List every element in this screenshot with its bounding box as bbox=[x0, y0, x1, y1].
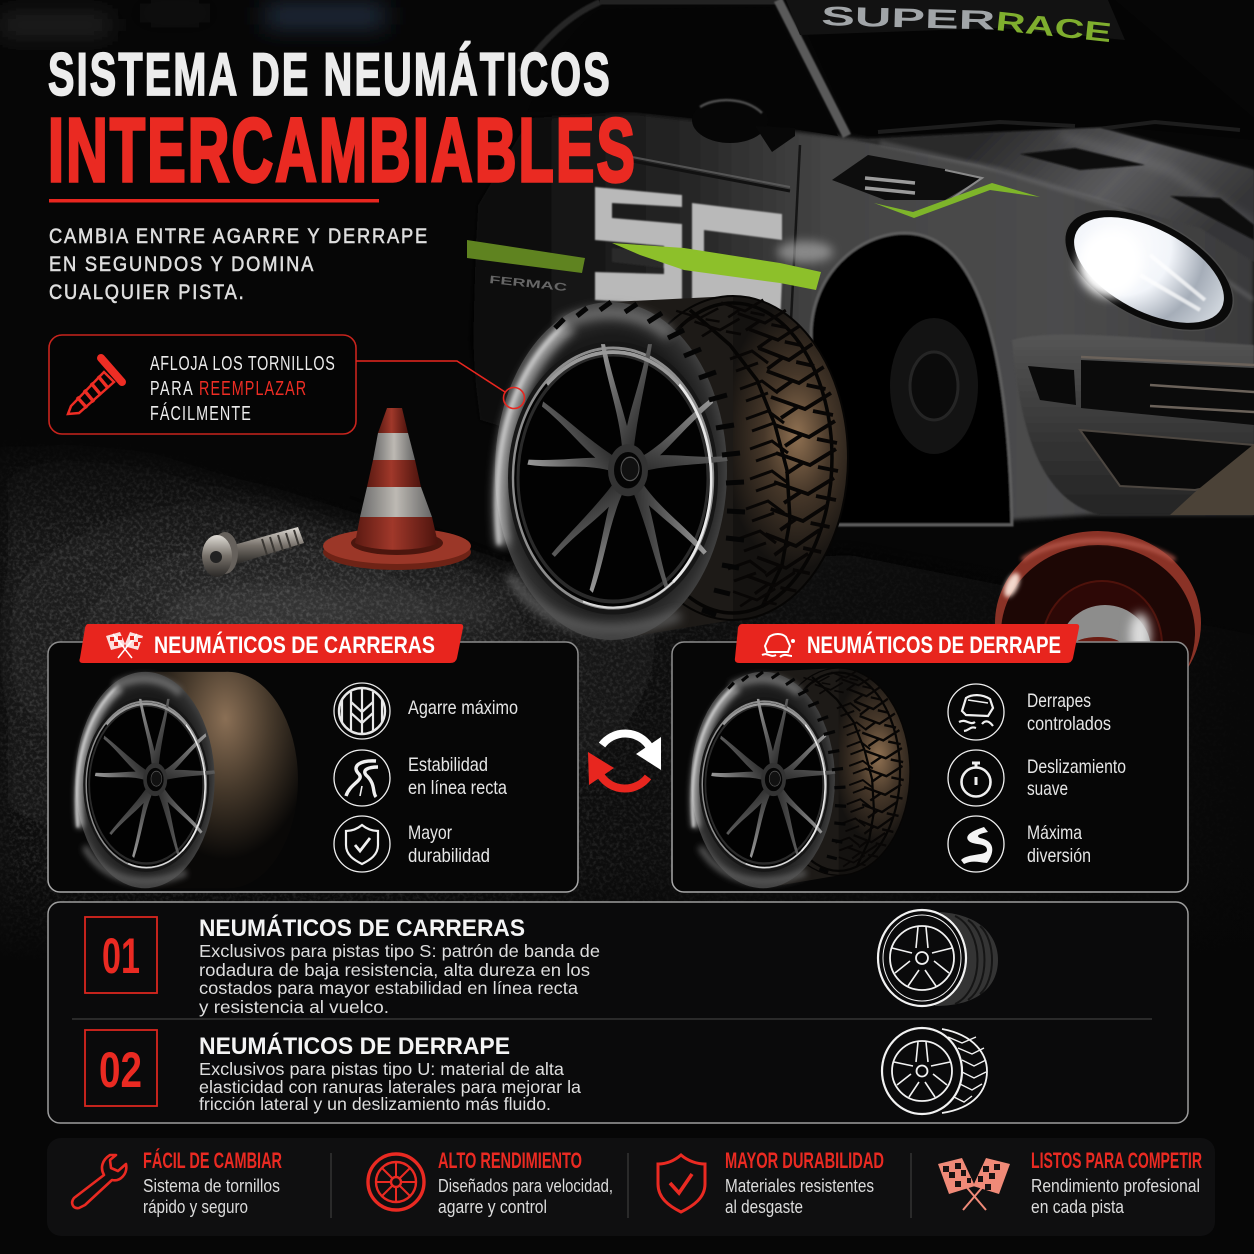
loose bolt bbox=[202, 527, 304, 577]
car roof and pillars bbox=[520, 0, 847, 136]
callout: loosen the screws bbox=[49, 335, 356, 434]
icon: tread bbox=[334, 683, 390, 739]
banner: racing tires bbox=[79, 624, 463, 663]
panel: tire descriptions bbox=[48, 902, 1188, 1123]
racing tire photo bbox=[75, 672, 298, 888]
icon: shield check bbox=[334, 816, 390, 872]
hood bbox=[855, 128, 1254, 262]
number box 01 bbox=[85, 917, 157, 993]
benefit: easy to change bbox=[72, 1148, 282, 1217]
icon: treaded tire line drawing bbox=[882, 1028, 987, 1114]
title line 1: SISTEMA DE NEUMÁTICOS bbox=[48, 41, 610, 108]
feature list: Agarre máximo bbox=[408, 697, 518, 719]
hood vents bbox=[1020, 148, 1254, 240]
feature list: diversión bbox=[1027, 845, 1091, 867]
red cone seen from below bbox=[995, 531, 1201, 721]
subtitle: EN SEGUNDOS Y DOMINA bbox=[49, 253, 314, 276]
benefits bar bbox=[47, 1138, 1215, 1236]
icon: shield bbox=[658, 1155, 705, 1212]
feature list: Deslizamiento bbox=[1027, 756, 1126, 778]
banner: drift tires bbox=[735, 624, 1079, 663]
icon: checkered flags bbox=[106, 632, 143, 658]
feature list: suave bbox=[1027, 778, 1068, 800]
door seam and crease bbox=[790, 145, 800, 340]
icon: car bbox=[762, 634, 794, 657]
title underline bbox=[49, 199, 379, 202]
icon: slick tire line drawing bbox=[878, 910, 998, 1006]
benefit: durability: MAYOR DURABILIDAD bbox=[725, 1148, 884, 1173]
benefit: ready to compete bbox=[938, 1148, 1202, 1217]
icon: stopwatch bbox=[948, 750, 1004, 806]
windshield banner text bbox=[786, 0, 1125, 48]
description 01: y resistencia al vuelco. bbox=[199, 997, 389, 1017]
banner: drift tires: NEUMÁTICOS DE DERRAPE bbox=[807, 631, 1061, 659]
icon: winding road bbox=[334, 750, 390, 806]
number box 02 bbox=[85, 1030, 157, 1106]
benefit: ready to compete: Rendimiento profesional bbox=[1031, 1176, 1200, 1196]
callout text bbox=[150, 351, 335, 425]
panel: drift tires bbox=[672, 642, 1188, 892]
benefit: high performance bbox=[368, 1148, 613, 1217]
description 01: Exclusivos para pistas tipo S: patrón de banda de bbox=[199, 941, 600, 961]
banner: racing tires: NEUMÁTICOS DE CARRERAS bbox=[154, 631, 435, 659]
side window bbox=[527, 7, 838, 136]
title bbox=[48, 41, 635, 201]
white arrow bbox=[602, 733, 661, 770]
icon: s-curve road bbox=[948, 816, 1004, 872]
windshield banner text: RACE bbox=[994, 6, 1113, 48]
benefit: durability bbox=[658, 1148, 884, 1217]
race car with number 56 bbox=[467, 0, 1254, 525]
subtitle: CUALQUIER PISTA. bbox=[49, 281, 244, 304]
callout text: AFLOJA LOS TORNILLOS bbox=[150, 351, 335, 375]
benefit: easy to change: Sistema de tornillos bbox=[143, 1176, 280, 1196]
description 01: NEUMÁTICOS DE CARRERAS bbox=[199, 914, 525, 942]
description 02: Exclusivos para pistas tipo U: material de alta bbox=[199, 1059, 564, 1079]
description 01: costados para mayor estabilidad en línea recta bbox=[199, 978, 578, 998]
windshield banner text: SUPER bbox=[821, 1, 996, 36]
feature list: durabilidad bbox=[408, 845, 490, 867]
callout text: FÁCILMENTE bbox=[150, 401, 251, 425]
feature list: Estabilidad bbox=[408, 754, 488, 776]
description 02: fricción lateral y un deslizamiento más fluido. bbox=[199, 1094, 551, 1114]
feature list: Máxima bbox=[1027, 822, 1082, 844]
icon: drifting car bbox=[948, 684, 1004, 740]
icon: checkered flags bbox=[938, 1158, 1010, 1210]
number box 01: 01 bbox=[102, 928, 140, 984]
feature list: Derrapes bbox=[1027, 690, 1091, 712]
callout leader line bbox=[356, 361, 524, 408]
benefit: high performance: agarre y control bbox=[438, 1197, 547, 1217]
benefit: high performance: ALTO RENDIMIENTO bbox=[438, 1148, 582, 1173]
main tire with interchangeable tread bbox=[495, 296, 848, 640]
panel: racing tires bbox=[48, 642, 578, 892]
number box 02: 02 bbox=[99, 1042, 142, 1098]
benefit: easy to change: rápido y seguro bbox=[143, 1197, 248, 1217]
benefit: durability: al desgaste bbox=[725, 1197, 803, 1217]
callout text: REEMPLAZAR bbox=[199, 376, 306, 400]
front brake disc bbox=[890, 318, 978, 454]
description 01 bbox=[199, 914, 600, 1017]
description 02 bbox=[199, 1032, 581, 1114]
windshield bbox=[792, 0, 1254, 140]
description 02: elasticidad con ranuras laterales para mejorar la bbox=[199, 1077, 581, 1097]
callout text: PARA bbox=[150, 376, 193, 400]
benefit: ready to compete: en cada pista bbox=[1031, 1197, 1125, 1217]
fender vent bbox=[832, 155, 982, 200]
feature list: en línea recta bbox=[408, 777, 507, 799]
front wheel arch bbox=[811, 233, 1012, 525]
traffic cone bbox=[323, 408, 471, 570]
benefit: durability: Materiales resistentes bbox=[725, 1176, 874, 1196]
textured floor bbox=[0, 454, 998, 935]
feature list bbox=[1027, 690, 1126, 867]
headlight bbox=[1045, 184, 1253, 356]
car body bbox=[470, 113, 1254, 520]
sponsor text: FERMAC bbox=[489, 274, 568, 294]
swap arrows bbox=[588, 733, 661, 789]
title line 2: INTERCAMBIABLES bbox=[48, 101, 635, 201]
icon: screw bbox=[68, 358, 122, 414]
grille bbox=[1028, 357, 1254, 425]
subtitle bbox=[49, 225, 427, 304]
description 01: rodadura de baja resistencia, alta dureza en los bbox=[199, 960, 590, 980]
lower intake bbox=[1080, 430, 1254, 490]
feature list: controlados bbox=[1027, 713, 1111, 735]
side mirror bbox=[692, 97, 795, 152]
wipers bbox=[878, 122, 1240, 132]
bumper bbox=[1012, 335, 1254, 515]
feature list: Mayor bbox=[408, 822, 452, 844]
door highlight bbox=[777, 241, 833, 263]
green stripes bbox=[467, 183, 1040, 290]
benefit: easy to change: FÁCIL DE CAMBIAR bbox=[143, 1148, 282, 1173]
subtitle: CAMBIA ENTRE AGARRE Y DERRAPE bbox=[49, 225, 427, 248]
benefit: high performance: Diseñados para velocidad, bbox=[438, 1176, 613, 1196]
icon: wheel bbox=[368, 1154, 424, 1210]
description 02: NEUMÁTICOS DE DERRAPE bbox=[199, 1032, 510, 1060]
drift tire photo bbox=[691, 668, 910, 888]
feature list bbox=[408, 697, 518, 867]
number 56 bbox=[595, 187, 782, 325]
red arrow bbox=[588, 752, 648, 789]
icon: wrench bbox=[72, 1155, 126, 1208]
